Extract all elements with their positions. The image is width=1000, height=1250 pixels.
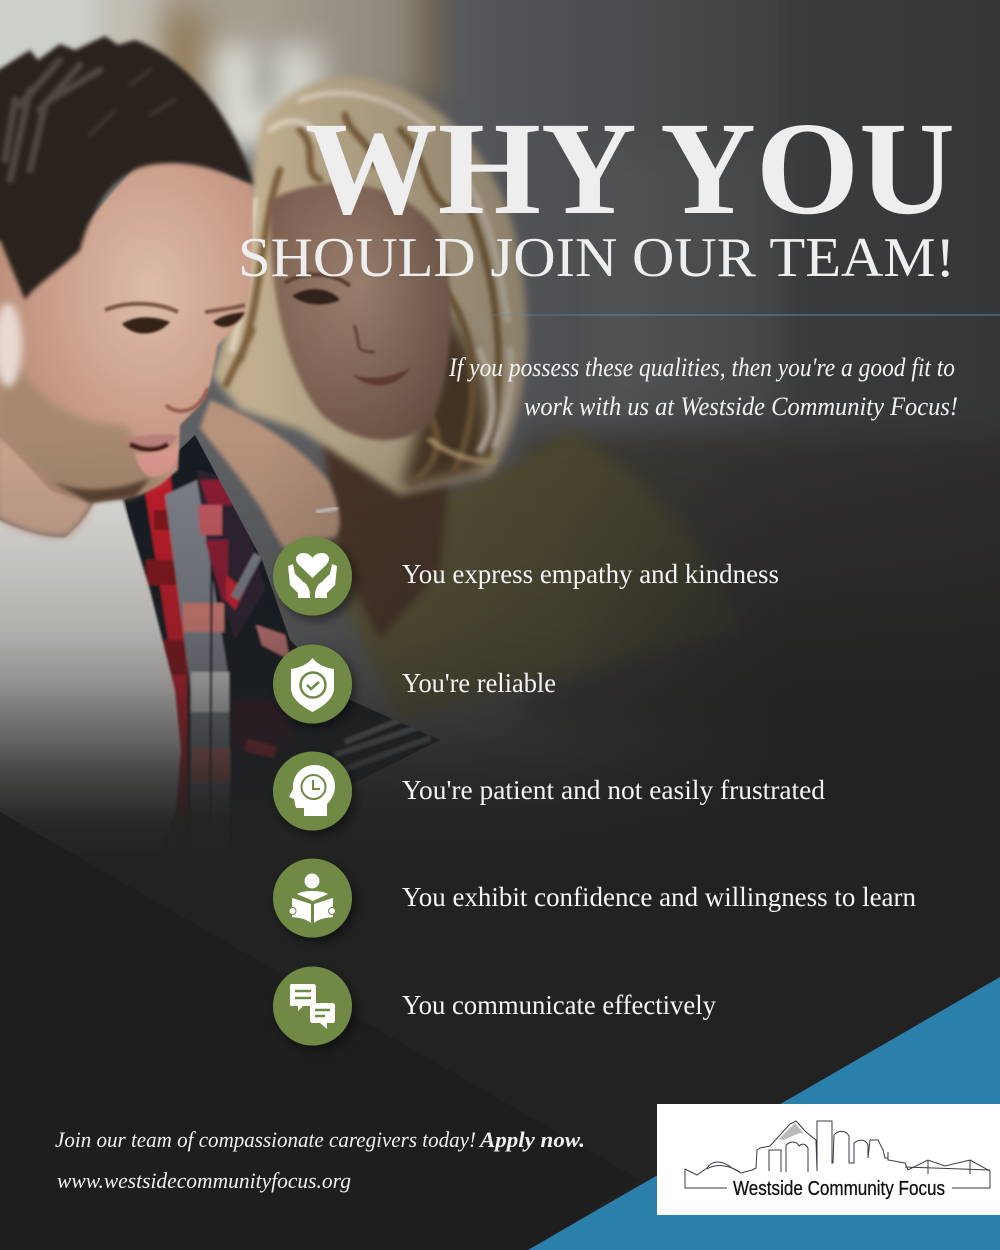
- man: [0, 36, 450, 880]
- mountain snowcap: [779, 1123, 816, 1140]
- icon: head with clock: [273, 752, 352, 830]
- label: You're patient and not easily frustrated: [402, 775, 825, 805]
- man's features: [105, 304, 245, 477]
- title: [238, 94, 955, 289]
- icon: shield with check: [273, 644, 352, 724]
- man's hair highlights: [5, 60, 175, 180]
- caregiver woman: [200, 77, 740, 720]
- blue diagonal corner: [528, 977, 1000, 1250]
- man's temple highlight: [0, 303, 22, 387]
- icon: person reading book: [273, 858, 352, 938]
- woman's face: [270, 183, 451, 440]
- man's face: [0, 160, 253, 503]
- apply now: Apply now.: [478, 1127, 585, 1152]
- label: You communicate effectively: [402, 990, 716, 1020]
- quality 5: communication: [273, 966, 716, 1046]
- quality 4: confidence: [273, 858, 916, 938]
- quality 3: patience: [273, 752, 825, 830]
- label: You're reliable: [402, 668, 556, 698]
- label: You express empathy and kindness: [402, 559, 779, 589]
- call to action: [55, 1127, 585, 1193]
- man's far sleeve: [0, 610, 14, 735]
- lower right darkening: [0, 471, 1000, 806]
- subheadline: SHOULD JOIN OUR TEAM!: [238, 227, 955, 289]
- icon: speech bubbles: [273, 966, 352, 1046]
- skyline drawing: [685, 1121, 990, 1188]
- intro text: If you possess these qualities, then you're a good fit to: [448, 353, 955, 382]
- right darkening overlay: [0, 0, 1000, 1000]
- man's t-shirt: [0, 498, 181, 880]
- man's neck: [0, 430, 95, 537]
- intro text: [448, 353, 958, 421]
- apply message: Join our team of compassionate caregivers today!: [55, 1127, 476, 1152]
- logo wordmark: Westside Community Focus: [733, 1178, 945, 1200]
- logo: Westside Community Focus: [657, 1104, 1000, 1215]
- website: www.westsidecommunityfocus.org: [57, 1168, 351, 1193]
- man's stubble: [0, 320, 165, 498]
- dark diagonal panel: [0, 812, 640, 1250]
- icon: hands holding heart: [273, 536, 352, 616]
- man's plaid shirt: [125, 435, 440, 806]
- room background: [0, 0, 1000, 980]
- woman's chest: [320, 420, 450, 640]
- woman's hair curls: [226, 93, 511, 482]
- woman's hair shadow: [400, 300, 486, 490]
- woman's jacket: [330, 430, 740, 720]
- woman's ring: [316, 508, 338, 512]
- quality 2: reliable: [273, 644, 556, 724]
- man's hair: [0, 36, 254, 300]
- woman's hair: [212, 77, 527, 495]
- intro text: work with us at Westside Community Focus!: [524, 392, 958, 421]
- woman's arm and hand: [200, 400, 340, 557]
- man's beard shadow: [50, 478, 150, 503]
- background photo: man and caregiver: [0, 0, 1000, 818]
- headline: why you: WHY YOU: [305, 94, 955, 242]
- label: You exhibit confidence and willingness to learn: [402, 882, 916, 912]
- quality 1: empathy: [273, 536, 779, 616]
- woman's features: [285, 275, 410, 385]
- divider rule: [440, 314, 1000, 316]
